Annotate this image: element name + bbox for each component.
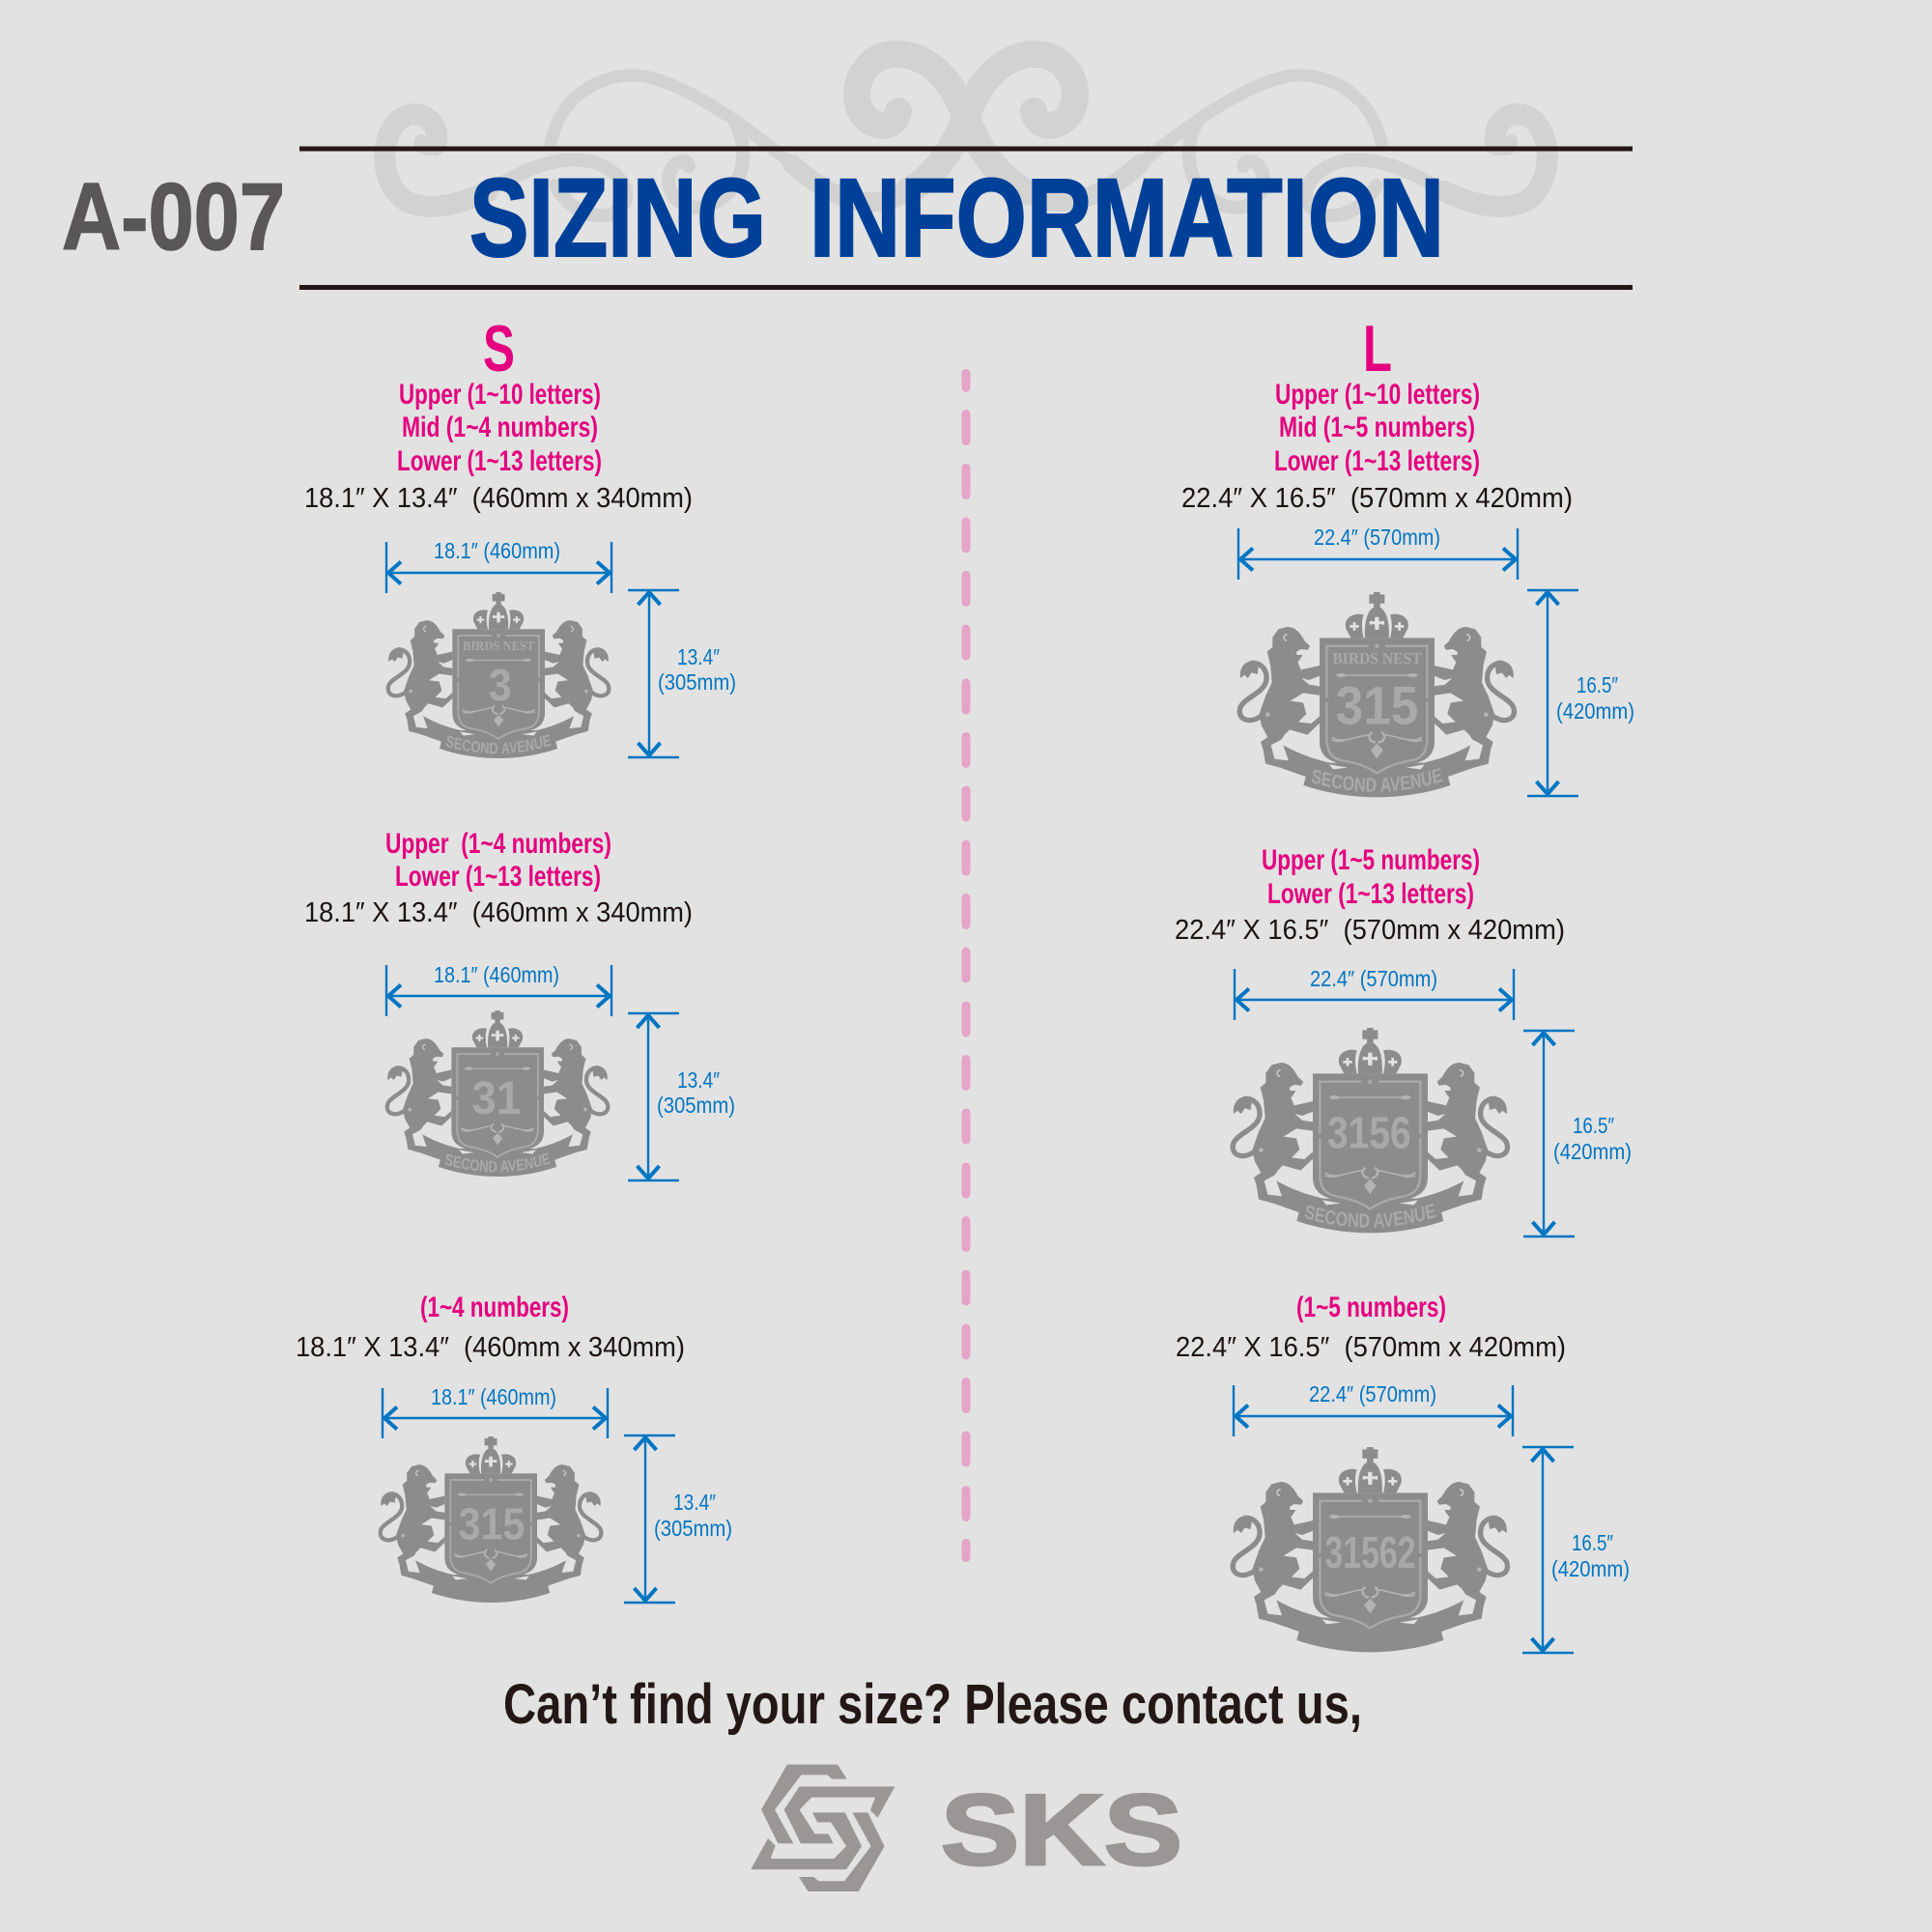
spec text S2: Lower (1~13 letters) [395, 861, 601, 893]
crest S3: 315 [459, 1498, 525, 1549]
spec text S2 [304, 828, 693, 928]
panel: L numbers only [1176, 1292, 1630, 1653]
heading: size L: L [1363, 312, 1392, 385]
height dimension L2: (420mm) [1553, 1139, 1632, 1164]
spec text S3: 18.1″ X 13.4″ (460mm x 340mm) [296, 1332, 685, 1363]
crest L2: 3156 [1327, 1107, 1411, 1157]
height dimension S2: (305mm) [657, 1093, 735, 1118]
height dimension L1: 16.5″ [1577, 672, 1618, 697]
crest S2: SECOND AVENUE [444, 1152, 551, 1173]
panel: S numbers only [296, 1292, 732, 1603]
crest L2 [1231, 1028, 1511, 1233]
width dimension S3: 18.1″ (460mm) [431, 1384, 556, 1409]
crest S2 [384, 1010, 611, 1177]
spec text L1: Upper (1~10 letters) [1275, 379, 1480, 411]
spec text L1: Mid (1~5 numbers) [1279, 412, 1475, 443]
ornament: header scrollwork [384, 54, 1548, 215]
title [469, 156, 1444, 280]
spec text L1 [1181, 379, 1573, 514]
crest L1: 315 [1336, 676, 1418, 736]
crest L2: SECOND AVENUE [1304, 1204, 1435, 1227]
header rule top [299, 147, 1633, 151]
height dimension S3: 13.4″ [673, 1490, 716, 1515]
height dimension L1 [1527, 590, 1634, 796]
title: INFORMATION [810, 156, 1444, 280]
height dimension S1 [628, 590, 736, 757]
panel: L upper lower [1175, 844, 1632, 1238]
spec text L2: Upper (1~5 numbers) [1262, 844, 1480, 876]
spec text L2 [1175, 844, 1565, 946]
spec text L2: Lower (1~13 letters) [1267, 878, 1474, 910]
height dimension S3 [624, 1435, 732, 1603]
product code: A-007 [62, 163, 285, 270]
height dimension L1: (420mm) [1556, 698, 1634, 724]
spec text L2: 22.4″ X 16.5″ (570mm x 420mm) [1175, 915, 1565, 946]
spec text S1 [304, 379, 693, 514]
spec text S2: Upper (1~4 numbers) [385, 828, 611, 860]
width dimension S1 [386, 538, 611, 593]
height dimension L3: (420mm) [1551, 1556, 1630, 1581]
width dimension L3: 22.4″ (570mm) [1309, 1381, 1436, 1406]
height dimension S3: (305mm) [654, 1516, 732, 1541]
height dimension L3: 16.5″ [1572, 1530, 1613, 1555]
panel: S upper mid lower [304, 379, 736, 759]
panel: S upper lower [304, 828, 735, 1182]
height dimension L2: 16.5″ [1573, 1113, 1614, 1138]
height dimension S1: (305mm) [658, 669, 736, 695]
spec text S1: Lower (1~13 letters) [397, 445, 602, 477]
spec text S1: 18.1″ X 13.4″ (460mm x 340mm) [304, 483, 693, 514]
spec text L3: (1~5 numbers) [1296, 1292, 1446, 1323]
height dimension S2: 13.4″ [677, 1067, 720, 1093]
height dimension L3 [1522, 1447, 1630, 1653]
width dimension L2 [1235, 966, 1514, 1020]
width dimension L1 [1238, 525, 1518, 580]
title: SIZING [469, 156, 766, 280]
crest S1: BIRDS NEST [463, 639, 535, 654]
spec text S3: (1~4 numbers) [420, 1292, 569, 1323]
crest L1 [1236, 592, 1517, 798]
crest S3 [381, 1436, 601, 1603]
width dimension S2: 18.1″ (460mm) [434, 962, 559, 987]
width dimension L1: 22.4″ (570mm) [1314, 525, 1440, 550]
crest L3 [1233, 1447, 1507, 1652]
panel: L upper mid lower [1181, 379, 1634, 798]
spec text S3 [296, 1292, 685, 1363]
spec text L1: Lower (1~13 letters) [1274, 445, 1480, 477]
crest S1: SECOND AVENUE [446, 734, 552, 753]
width dimension S3 [383, 1384, 608, 1438]
spec text S1: Mid (1~4 numbers) [402, 412, 598, 443]
crest S1: 3 [489, 660, 512, 710]
width dimension S2 [386, 962, 611, 1016]
spec text L3: 22.4″ X 16.5″ (570mm x 420mm) [1176, 1332, 1566, 1363]
width dimension L2: 22.4″ (570mm) [1310, 966, 1437, 991]
height dimension L2 [1523, 1031, 1632, 1236]
width dimension S1: 18.1″ (460mm) [434, 538, 560, 563]
brand name: SKS [941, 1775, 1182, 1887]
crest L3: 31562 [1324, 1527, 1416, 1577]
header rule bottom [299, 285, 1633, 290]
spec text S1: Upper (1~10 letters) [399, 379, 601, 411]
crest L1: BIRDS NEST [1332, 649, 1422, 668]
height dimension S1: 13.4″ [677, 644, 720, 669]
crest S1 [386, 592, 611, 758]
height dimension S2 [628, 1013, 735, 1180]
spec text L1: 22.4″ X 16.5″ (570mm x 420mm) [1181, 483, 1573, 514]
crest S2: 31 [471, 1072, 521, 1124]
icon: SKS logo mark [751, 1765, 895, 1891]
heading: size S: S [483, 312, 515, 385]
spec text L3 [1176, 1292, 1566, 1363]
contact line: Can’t find your size? Please contact us, [503, 1673, 1362, 1736]
divider: pink dashed line [962, 373, 970, 1557]
spec text S2: 18.1″ X 13.4″ (460mm x 340mm) [304, 897, 693, 928]
width dimension L3 [1234, 1381, 1513, 1436]
crest L1: SECOND AVENUE [1312, 768, 1443, 792]
